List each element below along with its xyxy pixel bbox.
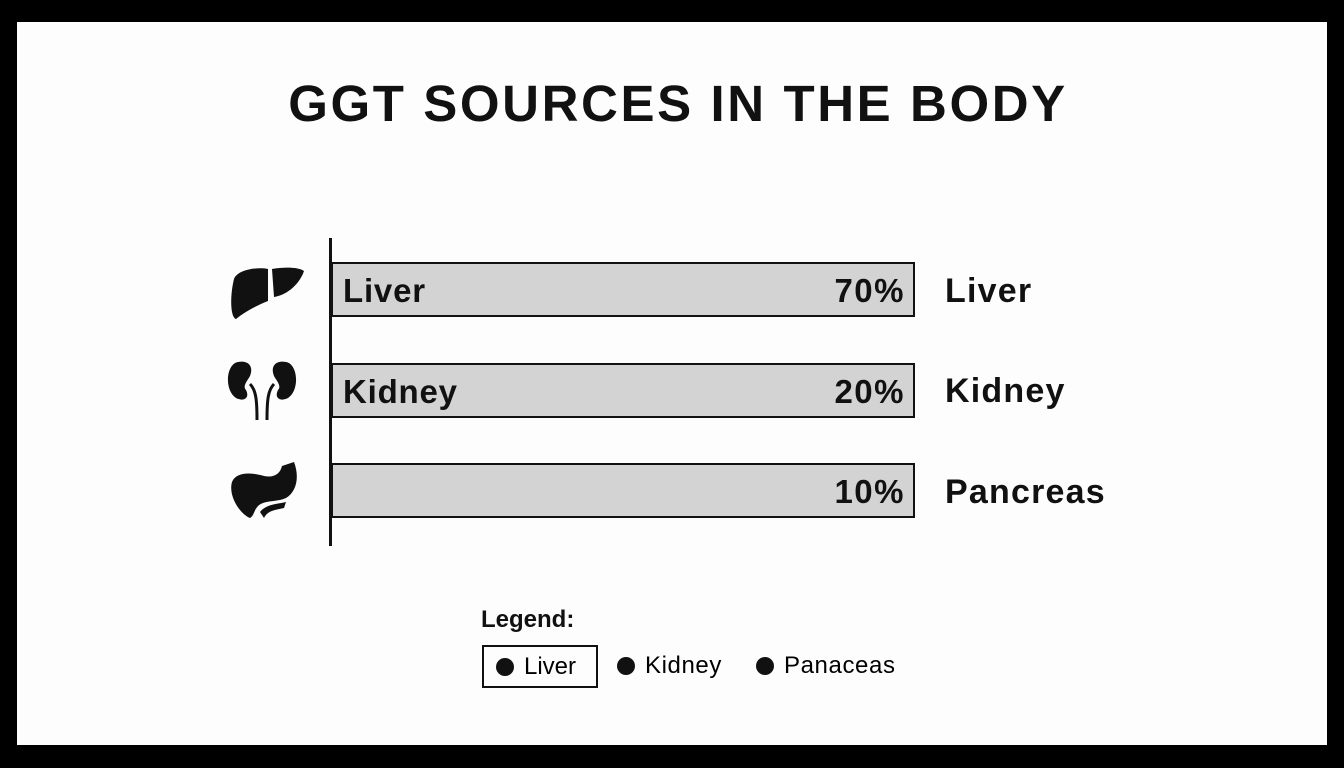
icon: kidneys <box>228 362 296 420</box>
title: GGT SOURCES IN THE BODY <box>288 75 1068 132</box>
axis line <box>329 238 332 546</box>
bar: pancreas <box>331 463 915 518</box>
legend item: liver: Liver <box>524 653 576 680</box>
bar: liver: Liver <box>343 272 426 309</box>
legend item: pancreas: Panaceas <box>784 652 896 679</box>
label: pancreas: Pancreas <box>945 473 1106 511</box>
bar: liver: 70% <box>834 272 905 309</box>
bar: kidney: Kidney <box>343 373 458 410</box>
legend title: Legend: <box>481 606 574 633</box>
label: liver: Liver <box>945 272 1032 310</box>
label: kidney: Kidney <box>945 372 1066 410</box>
bar: pancreas: 10% <box>834 473 905 510</box>
legend <box>481 606 896 688</box>
bar: kidney <box>331 363 915 418</box>
legend item: kidney: Kidney <box>645 652 722 679</box>
icon: liver <box>231 268 304 319</box>
bar: liver <box>331 262 915 317</box>
icon: pancreas <box>231 462 297 518</box>
bar: kidney: 20% <box>834 373 905 410</box>
legend item: liver <box>482 645 598 688</box>
